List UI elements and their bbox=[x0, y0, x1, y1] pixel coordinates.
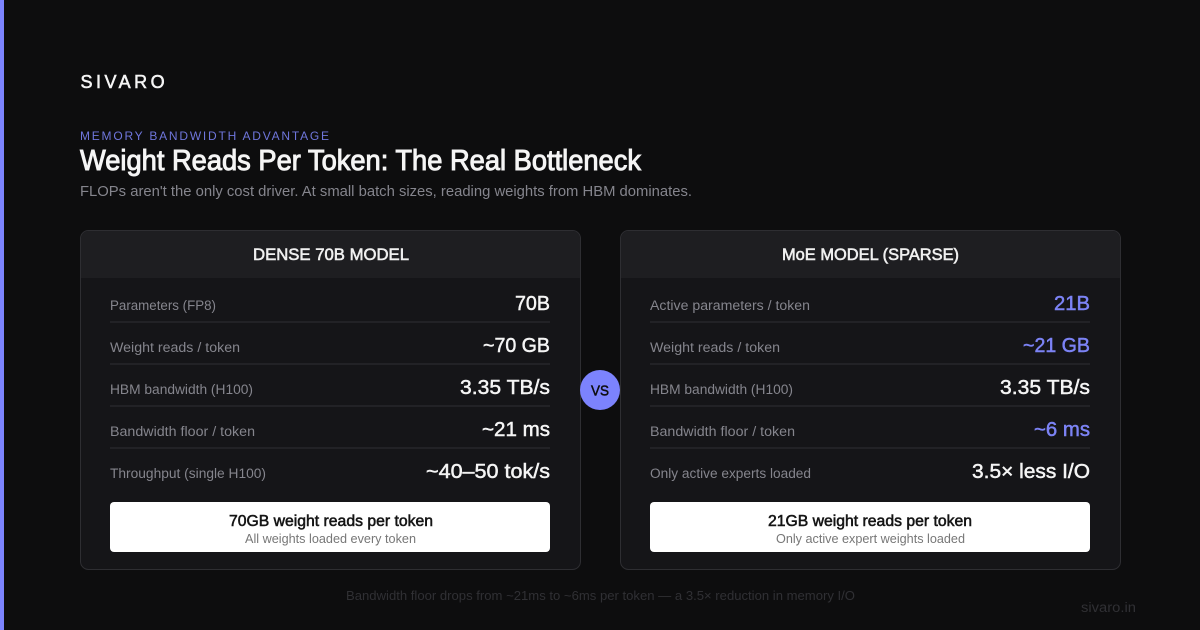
row: active parameters: Active parameters / token bbox=[650, 298, 810, 313]
row: bandwidth floor: ~6 ms bbox=[1034, 418, 1090, 441]
row: active experts: 3.5× less I/O bbox=[972, 460, 1090, 483]
callout: 21GB: 21GB weight reads per token bbox=[768, 513, 972, 530]
row: bandwidth floor: Bandwidth floor / token bbox=[650, 424, 795, 439]
row: bandwidth floor bbox=[110, 418, 550, 449]
row: HBM bandwidth bbox=[650, 376, 1090, 407]
row: parameters: Parameters (FP8) bbox=[110, 298, 216, 313]
row: weight reads: Weight reads / token bbox=[650, 340, 780, 355]
panel header: dense bbox=[81, 231, 580, 278]
panel header: dense: DENSE 70B MODEL bbox=[253, 245, 409, 264]
row: weight reads bbox=[650, 334, 1090, 365]
row: weight reads: ~70 GB bbox=[483, 334, 550, 357]
row: HBM bandwidth: HBM bandwidth (H100) bbox=[110, 382, 253, 397]
footnote: Bandwidth floor drops from ~21ms to ~6ms per token — a 3.5× reduction in memory I/O bbox=[346, 589, 855, 603]
subtitle: FLOPs aren't the only cost driver. At small batch sizes, reading weights from HBM dominates. bbox=[80, 184, 692, 200]
VS badge: VS bbox=[591, 382, 609, 400]
row: throughput: Throughput (single H100) bbox=[110, 466, 266, 481]
row: parameters: 70B bbox=[515, 292, 550, 315]
eyebrow: MEMORY BANDWIDTH ADVANTAGE bbox=[80, 129, 329, 143]
row: throughput bbox=[110, 460, 550, 483]
panel: MoE model bbox=[620, 230, 1120, 570]
callout: 21GB bbox=[650, 502, 1090, 552]
row: parameters bbox=[110, 292, 550, 323]
callout: 21GB: Only active expert weights loaded bbox=[776, 532, 965, 546]
callout: 70GB: 70GB weight reads per token bbox=[229, 513, 433, 530]
row: HBM bandwidth: 3.35 TB/s bbox=[1000, 376, 1090, 399]
row: active parameters: 21B bbox=[1054, 292, 1090, 315]
row: bandwidth floor bbox=[650, 418, 1090, 449]
row: HBM bandwidth: 3.35 TB/s bbox=[460, 376, 550, 399]
site url: sivaro.in bbox=[1081, 600, 1136, 615]
row: bandwidth floor: Bandwidth floor / token bbox=[110, 424, 255, 439]
callout: 70GB: All weights loaded every token bbox=[245, 532, 416, 546]
callout: 70GB bbox=[110, 502, 550, 552]
row: weight reads bbox=[110, 334, 550, 365]
row: bandwidth floor: ~21 ms bbox=[482, 418, 550, 441]
row: HBM bandwidth: HBM bandwidth (H100) bbox=[650, 382, 793, 397]
panel header: MoE bbox=[621, 231, 1120, 278]
logo: SIVARO bbox=[80, 72, 168, 92]
row: weight reads: Weight reads / token bbox=[110, 340, 240, 355]
row: active experts bbox=[650, 460, 1090, 483]
row: active parameters bbox=[650, 292, 1090, 323]
row: throughput: ~40–50 tok/s bbox=[426, 460, 550, 483]
row: weight reads: ~21 GB bbox=[1023, 334, 1090, 357]
VS badge bbox=[580, 370, 620, 410]
panel header: MoE: MoE MODEL (SPARSE) bbox=[782, 245, 959, 264]
row: HBM bandwidth bbox=[110, 376, 550, 407]
row: active experts: Only active experts loaded bbox=[650, 466, 811, 481]
title: Weight Reads Per Token: The Real Bottleneck bbox=[80, 145, 642, 177]
panel: dense 70B model bbox=[80, 230, 580, 570]
